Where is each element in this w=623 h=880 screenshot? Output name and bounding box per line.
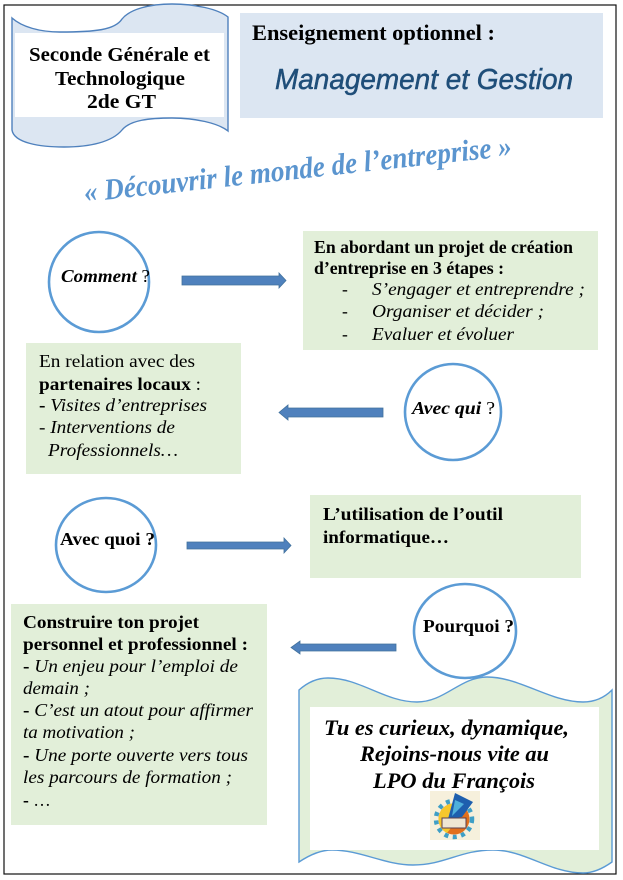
banner: Seconde Générale et Technologique: 2de GT (87, 92, 156, 113)
circle: Avec quoi (56, 498, 156, 592)
circle: Avec qui (405, 364, 501, 460)
panel: Construire ton projet: personnel et professionnel : (23, 634, 248, 654)
title panel: Enseignement optionnel: Management et Gestion (275, 64, 573, 96)
title panel: Enseignement optionnel (240, 13, 603, 118)
panel: Construire ton projet: les parcours de formation ; (23, 767, 232, 787)
panel: En abordant un projet: Evaluer et évoluer (371, 324, 514, 344)
panel: partenaires locaux: - Visites d’entreprises (39, 395, 207, 415)
panel: En abordant un projet: - (342, 279, 348, 299)
banner: Rejoins-nous (299, 677, 612, 873)
panel: En abordant un projet: Organiser et décider ; (372, 301, 544, 321)
circle: Comment (49, 232, 150, 332)
panel: partenaires locaux (26, 343, 241, 474)
panel: outil informatique (310, 495, 581, 578)
panel: outil informatique: L’utilisation de l’outil (323, 504, 503, 524)
banner: Seconde Générale et Technologique: Technologique (55, 69, 185, 90)
banner: Rejoins-nous: Tu es curieux, dynamique, (324, 715, 569, 740)
arrow: Avec qui to panel (279, 405, 383, 420)
panel: Construire ton projet: demain ; (23, 678, 90, 698)
arrow: Comment to panel (182, 273, 286, 288)
panel: En abordant un projet: En abordant un projet de création (314, 237, 573, 257)
icon: school logo (430, 791, 480, 840)
circle: Avec qui: Avec qui ? (411, 398, 495, 418)
banner: Seconde Générale et Technologique: Seconde Générale et (29, 45, 211, 66)
arrow: Pourquoi to panel (291, 641, 396, 654)
banner: Seconde Générale et Technologique (12, 4, 228, 147)
circle: Avec quoi: Avec quoi ? (60, 529, 155, 549)
panel: En abordant un projet: d’entreprise en 3 étapes : (314, 258, 504, 278)
circle: Pourquoi (414, 584, 516, 678)
title panel: Enseignement optionnel: Enseignement optionnel : (252, 20, 495, 45)
slogan: « Découvrir le monde de l’entreprise » (82, 130, 513, 209)
panel: partenaires locaux: En relation avec des (39, 351, 195, 371)
panel: partenaires locaux: - Interventions de (39, 417, 175, 437)
panel: Construire ton projet: - … (23, 790, 51, 810)
panel: Construire ton projet: - Une porte ouverte vers tous (23, 745, 248, 765)
panel: Construire ton projet: - C’est un atout pour affirmer (23, 700, 253, 720)
panel: outil informatique: informatique… (323, 527, 449, 547)
panel: Construire ton projet: Construire ton projet (23, 612, 199, 632)
panel: Construire ton projet (11, 604, 267, 825)
circle: Comment: Comment ? (61, 266, 150, 286)
panel: Construire ton projet: - Un enjeu pour l’emploi de (23, 656, 238, 676)
panel: En abordant un projet (303, 231, 598, 350)
panel: En abordant un projet: - (342, 301, 348, 321)
banner: Rejoins-nous: LPO du François (372, 768, 535, 793)
banner: Rejoins-nous: Rejoins-nous vite au (359, 741, 549, 766)
panel: partenaires locaux: Professionnels… (47, 440, 178, 460)
panel: Construire ton projet: ta motivation ; (23, 722, 135, 742)
panel: En abordant un projet: - (342, 324, 348, 344)
panel: partenaires locaux: partenaires locaux : (39, 374, 201, 394)
arrow: Avec quoi to panel (187, 538, 291, 553)
circle: Pourquoi: Pourquoi ? (423, 616, 514, 636)
panel: En abordant un projet: S’engager et entreprendre ; (372, 279, 585, 299)
